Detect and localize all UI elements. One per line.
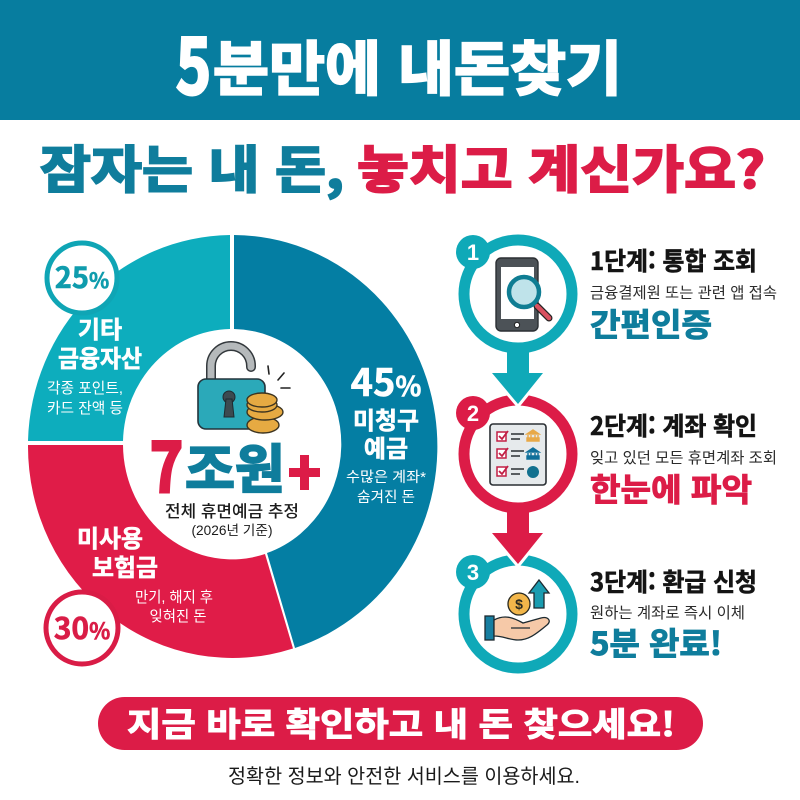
step 3 text: 원하는 계좌로 즉시 이체	[590, 604, 745, 622]
title banner: 분만에 내돈찾기	[213, 22, 622, 107]
label: unclaimed deposits: 숨겨진 돈	[357, 489, 415, 506]
label: unused insurance	[77, 519, 213, 625]
label: unclaimed deposits: 45%	[351, 352, 421, 407]
badge: 25%	[47, 243, 117, 313]
icon: checklist with banks	[490, 424, 546, 485]
segment: 45% unclaimed deposits	[234, 235, 437, 648]
label: unclaimed deposits: 미청구	[353, 401, 419, 436]
icon: hand with coin and up arrow: $	[515, 596, 523, 612]
step 1 text	[590, 242, 777, 346]
icon: phone with magnifier	[496, 258, 549, 331]
center caption	[165, 502, 299, 538]
headline question	[40, 129, 765, 203]
icon: unlocked padlock with coins	[198, 346, 290, 433]
step 3 ring	[464, 560, 572, 668]
call to action pill: 지금 바로 확인하고 내 돈 찾으세요!	[127, 698, 675, 746]
label: unused insurance: 보험금	[92, 548, 158, 583]
arrow: step 2 to step 3	[492, 510, 543, 564]
arrow: step 1 to step 2	[492, 350, 543, 404]
center caption: 전체 휴면예금 추정	[165, 502, 299, 521]
center total: 7조원+	[150, 413, 320, 512]
step 1 badge	[456, 235, 490, 269]
step 1	[456, 235, 777, 348]
title banner	[0, 0, 800, 120]
center total: 7조원+: 조원	[185, 428, 285, 504]
step 2 badge	[456, 396, 490, 430]
label: unclaimed deposits: 예금	[364, 429, 408, 464]
label: unused insurance: 미사용	[77, 519, 143, 554]
icon: hand with coin and up arrow	[485, 580, 549, 640]
step 3 text: 5분 완료!	[590, 619, 722, 665]
center caption: (2026년 기준)	[192, 523, 272, 538]
step 1 ring	[464, 240, 572, 348]
label: other financial assets	[47, 310, 142, 417]
step 2 text	[590, 407, 777, 511]
step 1 text: 1단계: 통합 조회	[590, 242, 757, 278]
badge: 30%: 30%	[54, 604, 110, 648]
label: unused insurance: 잊혀진 돈	[150, 608, 207, 625]
label: unclaimed deposits	[346, 352, 426, 506]
headline question: 놓치고 계신가요?	[357, 129, 765, 203]
step 2 ring	[464, 400, 572, 508]
label: other financial assets: 금융자산	[58, 339, 142, 374]
donut chart	[28, 235, 437, 664]
step 2 text: 한눈에 파악	[590, 465, 752, 511]
segment: 25% other financial assets	[28, 235, 230, 441]
step 3 text	[590, 563, 757, 665]
step 1 text: 금융결제원 또는 관련 앱 접속	[590, 284, 777, 302]
step 2 text: 잊고 있던 모든 휴면계좌 조회	[590, 449, 777, 467]
footer note: 정확한 정보와 안전한 서비스를 이용하세요.	[228, 765, 580, 788]
step 1 badge: 1	[467, 240, 479, 265]
badge: 25%: 25%	[55, 255, 109, 297]
step 3	[456, 555, 757, 668]
label: other financial assets: 기타	[78, 310, 122, 345]
segment: 30% unused insurance	[28, 445, 293, 658]
label: unclaimed deposits: 수많은 계좌*	[346, 469, 426, 486]
center total: 7조원+: 7	[150, 413, 183, 512]
label: other financial assets: 카드 잔액 등	[47, 400, 123, 417]
step 2 text: 2단계: 계좌 확인	[590, 407, 757, 443]
step 3 badge	[456, 555, 490, 589]
step 1 text: 간편인증	[590, 300, 712, 346]
title banner: 5	[176, 6, 211, 116]
label: other financial assets: 각종 포인트,	[47, 380, 123, 397]
step 2 badge: 2	[467, 401, 479, 426]
headline question: 잠자는 내 돈,	[40, 129, 344, 203]
step 3 text: 3단계: 환급 신청	[590, 563, 757, 599]
label: unused insurance: 만기, 해지 후	[135, 589, 213, 606]
step 3 badge: 3	[467, 560, 479, 585]
step 2	[456, 396, 777, 511]
badge: 30%	[46, 592, 118, 664]
